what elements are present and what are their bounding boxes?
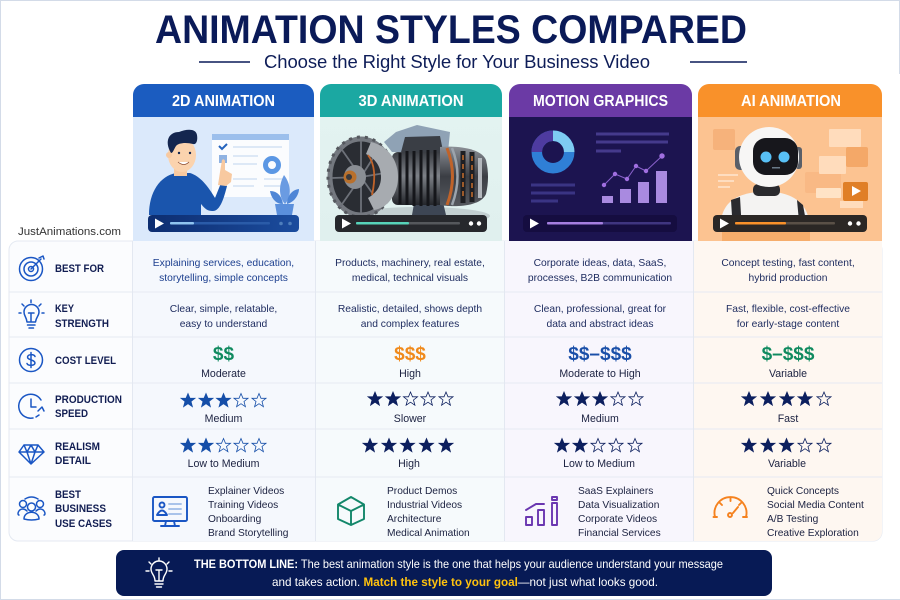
row: key strength: for early-stage content	[737, 319, 839, 330]
row: production speed	[19, 392, 831, 425]
row: best for: storytelling, simple concepts	[159, 273, 288, 284]
row: best for: Corporate ideas, data, SaaS,	[534, 258, 666, 269]
comparison table background	[9, 241, 882, 541]
stars: 3D realism	[363, 438, 453, 452]
panel: 2D animation header	[133, 84, 314, 117]
icon: light bulb	[19, 300, 44, 328]
row: cost level: $$–$$$	[568, 344, 632, 365]
row: key strength: Clean, professional, great for	[534, 304, 667, 315]
row: best business use cases: Explainer Videos	[208, 486, 284, 497]
illustration: 3D turbine engine	[320, 117, 502, 241]
row: cost level: $$	[213, 344, 234, 365]
row: best business use cases: BEST	[55, 489, 81, 501]
row: key strength	[19, 300, 850, 330]
row: best for: Concept testing, fast content,	[721, 258, 855, 269]
row: key strength: STRENGTH	[55, 318, 109, 330]
row: best business use cases: Architecture	[387, 514, 442, 525]
icon: bar chart	[526, 497, 557, 525]
illustration: 2D presenter	[133, 117, 314, 241]
row: realism detail: DETAIL	[55, 455, 91, 467]
icon: gauge	[714, 497, 747, 517]
row: best business use cases: BUSINESS	[55, 503, 106, 515]
row: cost level: COST LEVEL	[55, 355, 116, 367]
row: key strength: easy to understand	[180, 319, 268, 330]
callout: bottom line	[116, 550, 772, 596]
panel: 2D animation header: 2D ANIMATION	[172, 93, 275, 110]
row: best business use cases: Medical Animation	[387, 528, 470, 539]
icon: bulb	[146, 558, 172, 587]
subtitle: Choose the Right Style for Your Business Video	[264, 51, 650, 72]
panel: motion graphics header	[509, 84, 692, 117]
row: production speed: PRODUCTION	[55, 394, 122, 406]
row: production speed: SPEED	[55, 408, 88, 420]
row: production speed: Slower	[394, 413, 427, 425]
icon: target	[20, 256, 44, 280]
row: best business use cases: Product Demos	[387, 486, 457, 497]
row: key strength: Clear, simple, relatable,	[170, 304, 277, 315]
stars: motion realism	[555, 438, 642, 452]
icon: diamond	[19, 445, 44, 464]
row: realism detail: REALISM	[55, 441, 100, 453]
icon: dollar	[20, 348, 42, 372]
row: best business use cases: Creative Exploration	[767, 528, 859, 539]
row: best for: processes, B2B communication	[528, 273, 672, 284]
row: realism detail: Low to Medium	[188, 458, 260, 470]
row: best business use cases: SaaS Explainers	[578, 486, 653, 497]
row: best for	[20, 256, 855, 284]
row: key strength: data and abstract ideas	[546, 319, 654, 330]
icon: monitor	[153, 497, 187, 526]
illustration: AI robot	[698, 117, 882, 241]
row: best business use cases: A/B Testing	[767, 514, 819, 525]
stars: motion speed	[557, 392, 643, 405]
row: production speed: Medium	[581, 413, 619, 425]
panel: motion graphics header: MOTION GRAPHICS	[533, 93, 668, 110]
row: key strength: KEY	[55, 303, 75, 315]
title: ANIMATION STYLES COMPARED	[155, 8, 747, 52]
row: realism detail: Variable	[768, 458, 806, 470]
row: best business use cases: Onboarding	[208, 514, 262, 525]
panel: 3D animation header: 3D ANIMATION	[358, 93, 464, 110]
row: best business use cases: Brand Storytelling	[208, 528, 289, 539]
watermark: JustAnimations.com	[18, 226, 121, 238]
row: cost level: $$$	[394, 344, 426, 365]
row: best business use cases: Industrial Videos	[387, 500, 462, 511]
row: best for: hybrid production	[748, 273, 828, 284]
row: cost level: High	[399, 368, 421, 380]
row: best business use cases: Data Visualization	[578, 500, 659, 511]
panel: AI animation header: AI ANIMATION	[741, 93, 841, 110]
row: cost level: $–$$$	[762, 344, 815, 365]
row: best for: Products, machinery, real estate,	[335, 258, 485, 269]
callout: bottom line: and takes action. Match the style to your goal—not just what looks good.	[272, 575, 658, 589]
row: realism detail: High	[398, 458, 420, 470]
row: key strength: Fast, flexible, cost-effective	[726, 304, 850, 315]
row: key strength: Realistic, detailed, shows depth	[338, 304, 482, 315]
row: best for: medical, technical visuals	[352, 273, 468, 284]
panel: 3D animation header	[320, 84, 502, 117]
row: best business use cases: USE CASES	[55, 518, 112, 530]
row: best business use cases: Quick Concepts	[767, 486, 839, 497]
row: best business use cases: Social Media Content	[767, 500, 864, 511]
icon: cube	[338, 497, 364, 525]
stars: AI speed	[742, 392, 831, 405]
illustration: motion graphics dashboard	[509, 117, 692, 241]
row: cost level	[20, 344, 815, 380]
stars: 2D speed	[181, 394, 266, 407]
row: best for: BEST FOR	[55, 263, 104, 275]
row: best business use cases: Training Videos	[208, 500, 278, 511]
row: best business use cases: Corporate Videos	[578, 514, 657, 525]
row: realism detail: Low to Medium	[563, 458, 635, 470]
row: realism detail	[19, 438, 831, 470]
stars: 3D speed	[368, 392, 453, 405]
row: best business use cases	[18, 486, 864, 539]
row: best for: Explaining services, education,	[153, 258, 294, 269]
row: best business use cases: Financial Services	[578, 528, 661, 539]
row: cost level: Variable	[769, 368, 807, 380]
callout: bottom line: THE BOTTOM LINE: The best animation style is the one that helps your audience understand your message	[194, 557, 723, 571]
row: production speed: Medium	[205, 413, 243, 425]
icon: people	[18, 497, 45, 520]
panel: AI animation header	[698, 84, 882, 117]
row: key strength: and complex features	[361, 319, 459, 330]
row: production speed: Fast	[778, 413, 798, 425]
row: cost level: Moderate to High	[559, 368, 641, 380]
row: cost level: Moderate	[201, 368, 246, 380]
icon: clock	[19, 394, 44, 418]
stars: AI realism	[742, 438, 831, 452]
stars: 2D realism	[181, 438, 266, 452]
